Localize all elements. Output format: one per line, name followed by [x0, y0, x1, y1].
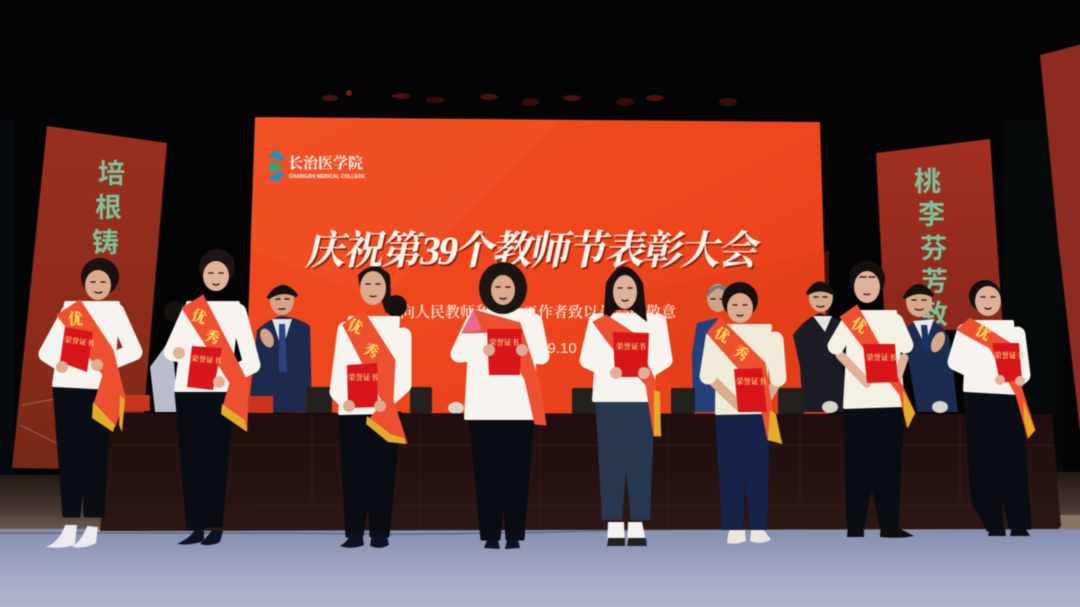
honoree 2 — [172, 249, 252, 545]
background person: man left — [250, 285, 312, 412]
sash: 优 — [68, 310, 83, 328]
legs — [54, 388, 110, 516]
honoree 1 — [46, 258, 134, 548]
LED screen — [245, 117, 829, 416]
screen logo — [268, 150, 366, 182]
honoree 7: 荣誉证书 — [866, 352, 896, 362]
banner: right: 致 — [921, 300, 948, 330]
honoree 3: 优 — [345, 315, 366, 338]
honoree 3: 荣誉证书 — [348, 372, 378, 382]
hands — [56, 359, 103, 373]
screen subtitle: 向人民教师和教育 — [400, 303, 520, 321]
banner: left — [12, 126, 167, 470]
background person: man right — [793, 282, 846, 412]
honoree 4: 荣誉证书 — [489, 337, 519, 347]
honoree 8: 优 — [972, 321, 994, 344]
honoree 7 — [836, 261, 915, 538]
banner: right: 芳 — [921, 267, 948, 297]
chairs — [306, 387, 804, 414]
background person: man far right — [903, 285, 958, 412]
name plates — [124, 395, 273, 413]
honoree 8 — [956, 280, 1035, 536]
shirt — [47, 303, 134, 388]
screen title: 庆祝第39个教师节表彰大会 — [305, 230, 766, 275]
stage back floor — [0, 472, 1080, 531]
honoree 5: 荣誉证书 — [616, 341, 646, 351]
head — [81, 258, 119, 300]
background person: woman — [150, 301, 186, 412]
ceiling lights — [322, 90, 737, 106]
honoree 3 — [338, 266, 407, 548]
screen subtitle — [400, 303, 677, 321]
tea cups — [448, 401, 948, 414]
background person: man grey hair — [692, 284, 729, 412]
banner: left: 根 — [95, 193, 122, 223]
honoree 7: 优 — [848, 314, 870, 337]
banner: right: 桃 — [914, 167, 941, 197]
banner: right: 芬 — [920, 234, 947, 264]
honoree 3: 秀 — [361, 339, 382, 362]
screen subtitle: 崇高的 — [600, 303, 645, 321]
banner: right: 李 — [918, 200, 945, 230]
honoree 2: 优 — [189, 306, 209, 328]
shoes — [46, 525, 98, 548]
banner: left: 铸 — [92, 228, 119, 258]
screen subtitle: 工作者致以 — [523, 303, 599, 321]
honoree 6: 秀 — [730, 342, 752, 365]
honoree 6 — [707, 282, 782, 544]
honoree 5 — [588, 266, 664, 546]
banner: left: 培 — [98, 159, 125, 189]
certificate: 荣誉证书 — [64, 334, 95, 348]
screen logo: 长治医学院 — [288, 154, 363, 172]
honoree 2: 秀 — [202, 326, 222, 348]
banner: right — [876, 139, 1003, 330]
stage floor — [0, 529, 1080, 607]
honoree 6: 荣誉证书 — [736, 376, 766, 386]
side curtains — [0, 120, 1063, 475]
stage cable — [0, 530, 640, 534]
screen title: 庆祝第39个教师节表彰大会 — [303, 228, 765, 273]
screen subtitle: 敬意 — [646, 303, 677, 321]
honoree 4 — [459, 262, 546, 549]
podium table — [100, 413, 1061, 531]
sash — [57, 300, 125, 432]
honoree 8: 荣誉证书 — [994, 350, 1024, 360]
honoree 2: 荣誉证书 — [191, 353, 222, 366]
honoree 6: 优 — [711, 324, 733, 347]
certificate — [60, 327, 95, 372]
screen date: 2023.9.10 — [510, 340, 577, 357]
screen logo: CHANGZHI MEDICAL COLLEGE — [289, 174, 366, 180]
banner: far right — [1040, 42, 1080, 430]
